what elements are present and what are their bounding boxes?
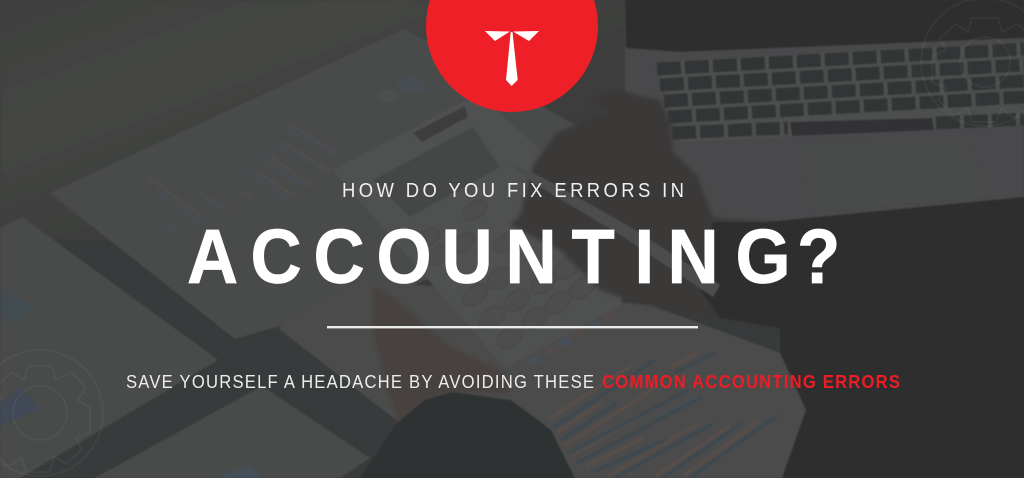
tagline: COMMON ACCOUNTING ERRORS xyxy=(602,371,900,392)
hand: right hand with pen xyxy=(500,90,780,328)
paper: financial account sheet xyxy=(95,386,370,478)
logo badge: red circle with tie xyxy=(426,0,598,112)
title: accounting: ACCOUNTING? xyxy=(187,213,840,300)
icon: tie logo xyxy=(485,31,539,86)
tagline: SAVE YOURSELF A HEADACHE BY AVOIDING THESE xyxy=(126,371,594,392)
icon: faint gear bottom left xyxy=(0,350,103,476)
hand: left hand under calculator xyxy=(372,285,512,425)
subtitle: how do you fix errors in: HOW DO YOU FIX ERRORS IN xyxy=(342,179,684,202)
paper: lower left sheet xyxy=(0,217,218,478)
icon: faint gear top right xyxy=(921,0,1024,126)
sleeve: lower dark cuff xyxy=(360,392,575,478)
divider rule xyxy=(327,326,698,328)
laptop xyxy=(625,0,1024,227)
sleeve: right dark cuff xyxy=(713,197,1024,478)
calculator xyxy=(333,94,640,368)
tagline xyxy=(126,371,900,392)
paper: bar chart sheet xyxy=(50,29,620,339)
paper: right chart sheet xyxy=(278,280,806,478)
